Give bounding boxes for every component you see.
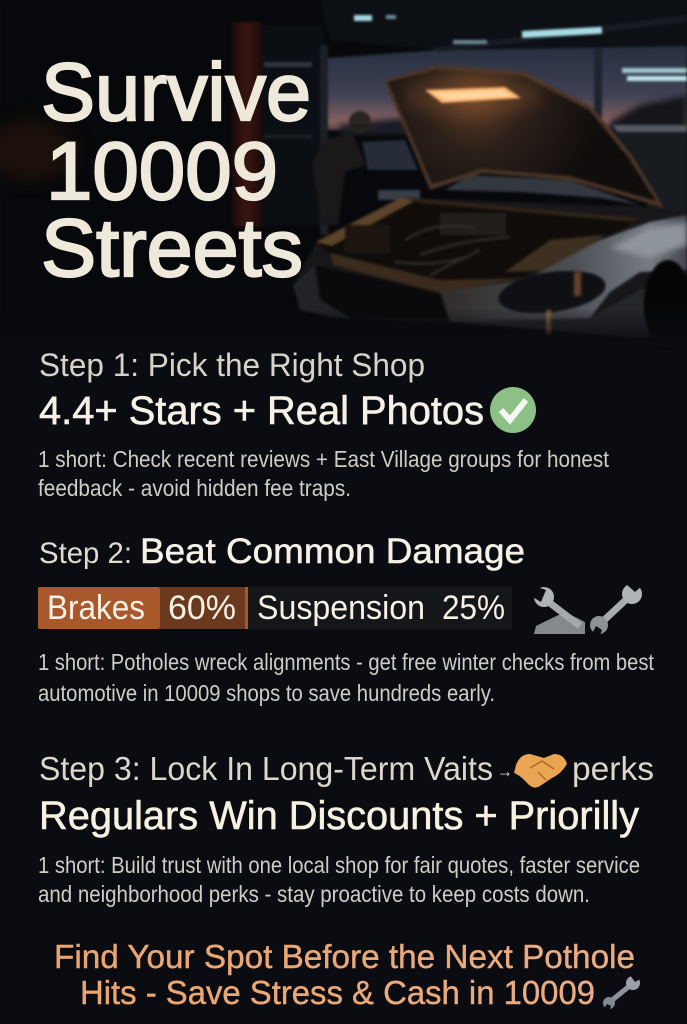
step 2 body: automotive in 10009 shops to save hundreds early. <box>38 680 495 706</box>
icon: green check <box>490 387 536 433</box>
step 1 heading: Step 1: Pick the Right Shop <box>39 347 425 383</box>
mechanic <box>312 111 374 225</box>
title: 10009 <box>46 126 278 217</box>
step 2 body <box>38 649 654 706</box>
step 1 body: feedback - avoid hidden fee traps. <box>38 475 351 501</box>
headlight <box>496 265 608 319</box>
step 1 <box>38 347 609 501</box>
step 3 body: and neighborhood perks - stay proactive to keep costs down. <box>38 881 590 907</box>
hero photo: car in garage <box>0 0 687 350</box>
step 2 heading: Step 2: <box>39 537 132 570</box>
step 1 body <box>38 446 609 501</box>
step 1 headline: 4.4+ Stars + Real Photos <box>39 389 484 433</box>
call to action: Hits - Save Stress & Cash in 10009 <box>80 974 595 1011</box>
call to action: Find Your Spot Before the Next Pothole <box>54 938 635 975</box>
icon: wrench on pothole <box>531 586 585 634</box>
step 3 heading: perks <box>572 750 654 787</box>
step 3 heading: → <box>497 761 513 781</box>
step 2 <box>38 532 654 706</box>
fender <box>440 215 687 322</box>
step 1 body: 1 short: Check recent reviews + East Village groups for honest <box>38 446 609 472</box>
step 3 body <box>38 852 640 907</box>
call to action <box>54 938 642 1012</box>
step 3 headline: Regulars Win Discounts + Priorilly <box>39 794 639 838</box>
icon: wrench <box>590 580 642 638</box>
bar chart: damage share: 25% <box>442 589 505 627</box>
step 3 <box>38 750 654 907</box>
open hood <box>384 65 664 208</box>
icon: wrench <box>603 973 642 1012</box>
title: Survive <box>41 47 311 138</box>
bar chart: damage share: Brakes <box>47 589 145 627</box>
engine bay <box>316 197 640 293</box>
title <box>41 47 311 294</box>
front bumper <box>315 265 450 320</box>
car lower body <box>293 198 687 338</box>
bar chart: damage share <box>38 587 512 629</box>
windshield and roof <box>610 125 687 220</box>
icon: handshake <box>514 754 567 788</box>
step 2 heading: Beat Common Damage <box>140 532 525 571</box>
bar chart: damage share: Suspension <box>257 589 425 627</box>
title: Streets <box>41 203 303 294</box>
bar chart: damage share: 60% <box>168 589 236 627</box>
step 3 heading: Step 3: Lock In Long-Term Vaits <box>39 750 493 787</box>
